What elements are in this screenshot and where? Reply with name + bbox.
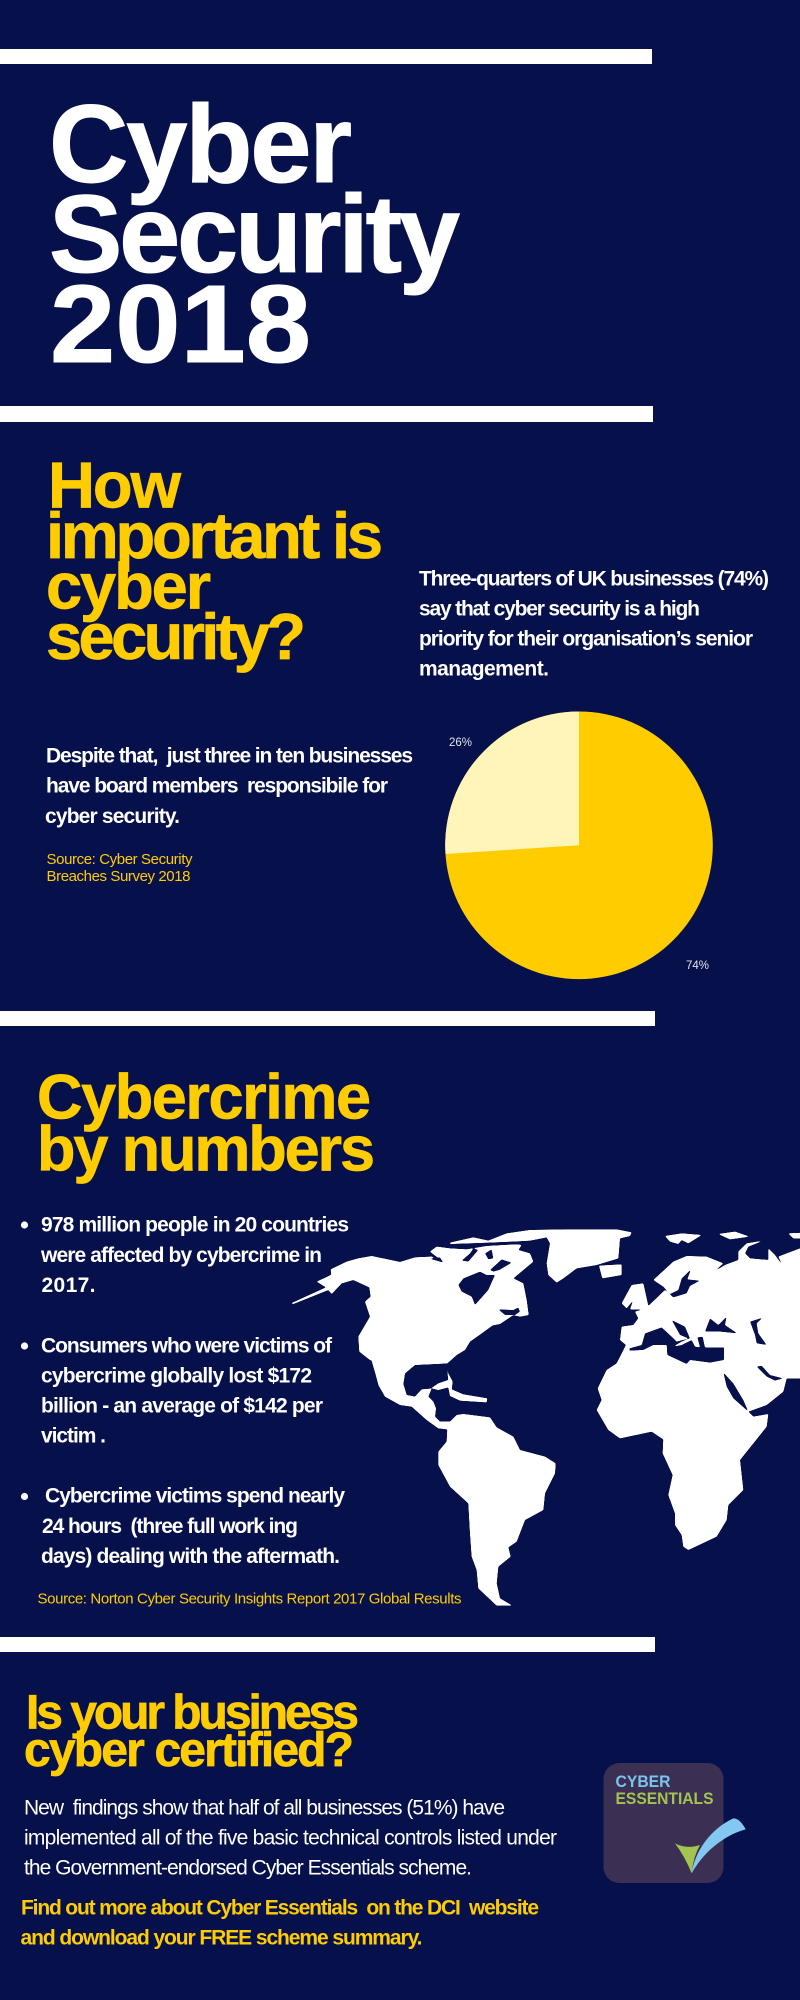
pie chart	[445, 712, 713, 979]
text: board members statistic	[45, 744, 413, 828]
heading: cybercrime by numbers: by numbers	[37, 1114, 375, 1184]
title: Cyber	[49, 83, 352, 206]
bullet: 24 hours dealing with the aftermath: days) dealing with the aftermath.	[41, 1545, 340, 1568]
heading: how important: important is	[46, 499, 383, 572]
bullet: 978 million people: were affected by cybercrime in	[40, 1244, 322, 1267]
source: breaches survey: Breaches Survey 2018	[46, 868, 190, 885]
source: breaches survey: Source: Cyber Security	[46, 851, 193, 868]
icon: cyber essentials badge: ESSENTIALS	[616, 1789, 714, 1808]
icon: cyber essentials badge	[604, 1763, 746, 1883]
text: three-quarters statistic: Three-quarters of UK businesses (74%)	[419, 568, 769, 590]
bullet: 978 million people: 978 million people in 20 countries	[41, 1214, 349, 1236]
heading: how important: How	[48, 448, 181, 522]
heading: cyber certified	[24, 1686, 359, 1777]
pie chart: 74%	[686, 958, 709, 972]
bullet: 24 hours dealing with the aftermath: 24 hours (three full work ing	[42, 1515, 298, 1538]
text: new findings: New findings show that half of all businesses (51%) have	[24, 1796, 505, 1819]
text: new findings: the Government-endorsed Cyber Essentials scheme.	[24, 1856, 472, 1879]
text: three-quarters statistic: priority for their organisation’s senior	[419, 628, 753, 650]
text: three-quarters statistic: say that cyber security is a high	[419, 598, 700, 620]
bullet: 978 million people: 2017.	[42, 1274, 96, 1297]
panel: cybercrime by numbers	[21, 1062, 800, 1623]
heading: how important: cyber	[46, 550, 211, 622]
world map	[280, 1213, 800, 1623]
pie chart: 26%	[449, 735, 472, 749]
heading: how important: security?	[46, 600, 306, 673]
bullet: 24 hours dealing with the aftermath	[21, 1484, 345, 1568]
icon: cyber essentials badge: CYBER	[616, 1772, 670, 1791]
text: new findings	[24, 1796, 557, 1879]
bullet: consumers lost $172 billion	[21, 1334, 333, 1448]
bullet: consumers lost $172 billion: billion - an average of $142 per	[41, 1394, 323, 1418]
text: new findings: implemented all of the five basic technical controls listed under	[24, 1826, 557, 1849]
text: board members statistic: have board members responsibile for	[46, 774, 388, 798]
heading: cybercrime by numbers: Cybercrime	[37, 1062, 371, 1132]
title	[49, 83, 460, 386]
heading: how important	[46, 448, 383, 673]
text: three-quarters statistic	[419, 568, 769, 680]
bullet: 24 hours dealing with the aftermath: Cybercrime victims spend nearly	[45, 1484, 345, 1508]
call to action	[20, 1896, 539, 1949]
bullet: consumers lost $172 billion: Consumers who were victims of	[41, 1334, 333, 1358]
heading: cyber certified: Is your business	[26, 1686, 359, 1739]
bullet: consumers lost $172 billion: victim .	[41, 1424, 106, 1448]
title: Security	[49, 173, 460, 296]
call to action: and download your FREE scheme summary.	[20, 1926, 423, 1949]
source: norton report: Source: Norton Cyber Security Insights Report 2017 Global Results	[38, 1590, 462, 1608]
text: three-quarters statistic: management.	[419, 658, 549, 680]
bullet: 978 million people	[21, 1214, 349, 1297]
panel: is your business cyber certified	[20, 1686, 746, 1949]
panel: how important is cyber security	[45, 448, 769, 979]
call to action: Find out more about Cyber Essentials on the DCI website	[21, 1896, 539, 1919]
bullet: consumers lost $172 billion: cybercrime globally lost $172	[41, 1364, 312, 1388]
text: board members statistic: cyber security.	[45, 805, 180, 828]
heading: cybercrime by numbers	[37, 1062, 375, 1184]
text: board members statistic: Despite that, just three in ten businesses	[46, 744, 413, 768]
heading: cyber certified: cyber certified?	[24, 1724, 354, 1777]
source: breaches survey	[46, 851, 193, 885]
title: 2018	[50, 263, 311, 386]
